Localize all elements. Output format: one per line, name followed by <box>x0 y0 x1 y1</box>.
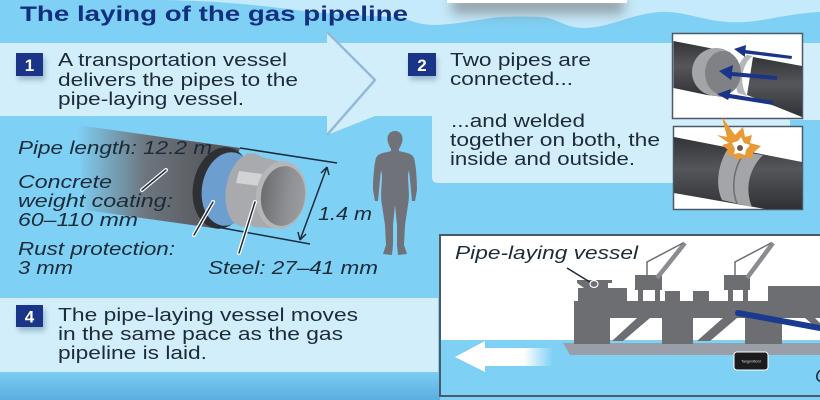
pipes being joined <box>674 41 802 117</box>
dimension lines <box>217 148 337 244</box>
arrow: direction of travel <box>455 341 553 372</box>
step 4 text: pipeline is laid. <box>58 342 207 363</box>
pipe opening <box>257 163 309 229</box>
illustration: pipe cross-section <box>18 125 378 278</box>
step 2 text: connected... <box>450 68 573 89</box>
arrow edge <box>327 32 375 135</box>
step 4 text: in the same pace as the gas <box>58 323 343 344</box>
blue arrows <box>717 45 792 105</box>
legs <box>574 303 610 344</box>
badge 4 <box>16 305 45 331</box>
pipe labels: 1.4 m <box>318 203 372 224</box>
deck <box>574 301 820 318</box>
icon: weld spark <box>717 117 761 160</box>
welded pipe <box>674 137 802 209</box>
pipeline <box>738 313 820 328</box>
bridge <box>577 280 627 301</box>
arrow tip <box>327 32 375 135</box>
badge 1 <box>16 53 45 80</box>
panel: weld image 2 <box>674 117 802 210</box>
black coating ring <box>186 143 258 233</box>
label: pipe-laying vessel <box>455 242 639 288</box>
panel: step 1 and step 2 band <box>0 43 820 183</box>
pipe labels: 60–110 mm <box>18 209 138 230</box>
crane 1 <box>635 243 685 301</box>
pipe labels: Concrete <box>18 171 112 192</box>
badge 4: 4 <box>25 308 35 326</box>
steel rim <box>252 158 310 232</box>
step 1 text: pipe-laying vessel. <box>58 88 244 109</box>
panel: vessel scene <box>440 235 820 396</box>
pipe concrete body <box>77 125 240 228</box>
step 2 text: together on both, the <box>450 129 660 150</box>
step 4 text: The pipe-laying vessel moves <box>58 304 358 325</box>
panel: step 4 band <box>0 298 438 372</box>
leader: concrete <box>142 170 166 190</box>
step 2 text: inside and outside. <box>450 148 635 169</box>
label: pipe-laying vessel: Pipe-laying vessel <box>455 242 639 263</box>
crane 2 <box>724 243 773 301</box>
title: The laying of the gas pipeline <box>20 2 408 26</box>
pipe labels: weight coating: <box>18 190 173 211</box>
deck blocks <box>665 291 680 301</box>
leader: steel <box>239 202 255 253</box>
step 4 text <box>58 304 358 363</box>
top white tab <box>447 0 627 3</box>
leader: rust <box>194 202 213 235</box>
blue rust protection <box>196 148 260 230</box>
step 2 text: ...and welded <box>451 110 585 131</box>
steel body <box>246 153 284 229</box>
step 2 text: Two pipes are <box>450 49 591 70</box>
pontoon <box>563 343 820 355</box>
top wave decoration <box>153 0 820 28</box>
badge 2 <box>408 53 437 80</box>
steel highlight <box>236 171 262 186</box>
step 4 <box>16 304 358 363</box>
pipe labels: Rust protection: <box>18 238 175 259</box>
badge 1: 1 <box>25 56 34 75</box>
step 1 text: A transportation vessel <box>58 49 287 70</box>
water <box>441 340 820 395</box>
pipe labels: Steel: 27–41 mm <box>208 257 378 278</box>
overlay tooltip: Tangentbord <box>741 360 761 364</box>
bottom band <box>0 372 440 400</box>
step 1 text <box>58 49 298 109</box>
pipe labels: 3 mm <box>18 257 73 278</box>
pipe labels: Pipe length: 12.2 m <box>18 137 212 158</box>
icon: human silhouette <box>373 131 417 255</box>
top shadow <box>452 0 624 14</box>
panel: weld image 1 <box>672 34 802 118</box>
step 2 text <box>450 49 660 169</box>
step 1 text: delivers the pipes to the <box>58 69 298 90</box>
vessel <box>563 243 820 355</box>
diagonals <box>612 318 650 341</box>
badge 2: 2 <box>417 56 427 75</box>
step 1 <box>16 49 298 109</box>
pipe labels <box>18 137 378 278</box>
overlay tooltip <box>734 352 768 370</box>
step 2 <box>408 49 660 169</box>
